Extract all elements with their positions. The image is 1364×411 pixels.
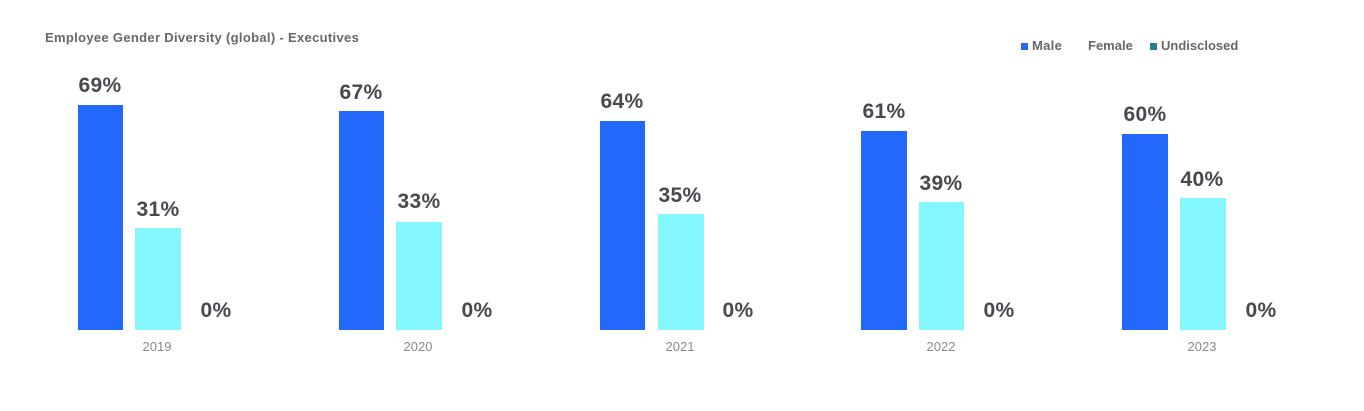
- title: Employee Gender Diversity (global) - Executives: [45, 30, 359, 45]
- group: 2022: 2022: [927, 339, 955, 354]
- group: 2023: 60%: [1124, 103, 1166, 126]
- group: 2023: 40%: [1181, 168, 1223, 191]
- group: 2019: 0%: [201, 299, 232, 322]
- legend: Female: [1088, 38, 1133, 53]
- group: 2022: 61%: [863, 100, 905, 123]
- group: 2020: 67%: [340, 81, 382, 104]
- group: 2022: [861, 100, 1015, 354]
- group: 2022: 0%: [984, 299, 1015, 322]
- group: 2019: [78, 74, 232, 354]
- group: 2021: 2021: [666, 339, 694, 354]
- legend: Male: [1032, 38, 1062, 53]
- group: 2021: 35%: [659, 184, 701, 207]
- group: 2023: [1122, 103, 1277, 354]
- group: 2019: 69%: [79, 74, 121, 97]
- group: 2019: 31%: [137, 198, 179, 221]
- group: 2021: 0%: [723, 299, 754, 322]
- group: 2021: [600, 90, 754, 354]
- legend: [1021, 38, 1238, 53]
- group: 2022: 39%: [920, 172, 962, 195]
- group: 2020: 33%: [398, 190, 440, 213]
- group: 2023: 0%: [1246, 299, 1277, 322]
- group: 2020: [339, 81, 493, 354]
- group: 2020: 2020: [404, 339, 432, 354]
- group: 2021: 64%: [601, 90, 643, 113]
- group: 2019: 2019: [143, 339, 171, 354]
- group: 2020: 0%: [462, 299, 493, 322]
- group: 2023: 2023: [1188, 339, 1216, 354]
- legend: Undisclosed: [1161, 38, 1238, 53]
